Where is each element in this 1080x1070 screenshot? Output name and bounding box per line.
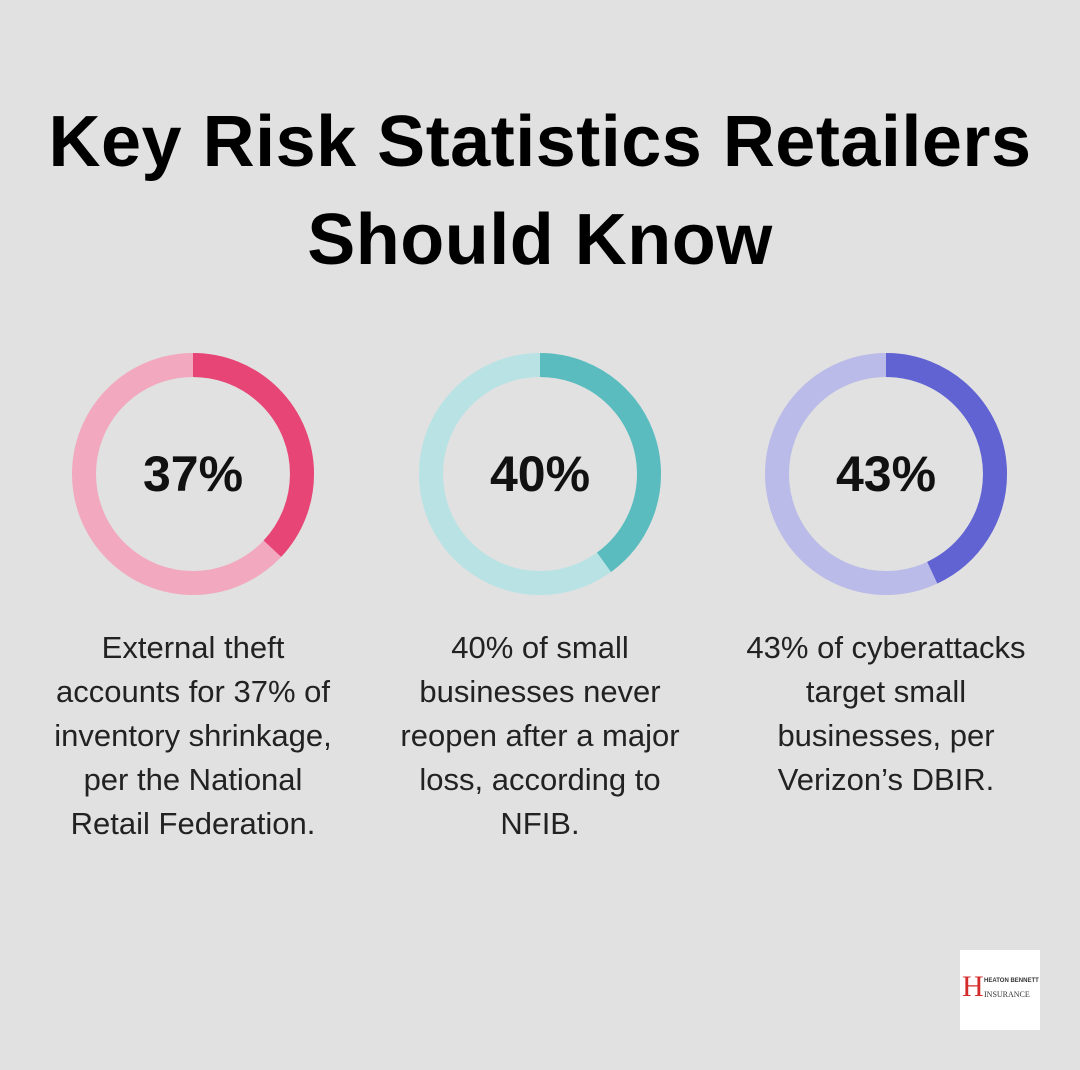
text: external theft bbox=[54, 630, 332, 841]
title bbox=[48, 102, 1031, 280]
donut: 37% bbox=[72, 353, 314, 595]
donut: 43% bbox=[765, 353, 1007, 595]
logo bbox=[960, 950, 1040, 1030]
text: small businesses: reopen after a major bbox=[400, 718, 680, 753]
text: external theft: inventory shrinkage, bbox=[54, 718, 332, 753]
text: cyberattacks bbox=[746, 630, 1026, 797]
donut: 40%: 40% bbox=[490, 446, 590, 502]
text: external theft: accounts for 37% of bbox=[56, 674, 330, 709]
text: external theft: External theft bbox=[102, 630, 284, 665]
text: small businesses: loss, according to bbox=[419, 762, 661, 797]
text: small businesses: NFIB. bbox=[500, 806, 580, 841]
donut: 37%: 37% bbox=[143, 446, 243, 502]
donut: 43%: 43% bbox=[836, 446, 936, 502]
title: Should Know bbox=[307, 200, 773, 280]
text: small businesses: businesses never bbox=[419, 674, 661, 709]
text: cyberattacks: target small bbox=[806, 674, 966, 709]
text: cyberattacks: 43% of cyberattacks bbox=[746, 630, 1026, 665]
text: cyberattacks: businesses, per bbox=[777, 718, 995, 753]
text: small businesses: 40% of small bbox=[451, 630, 629, 665]
text: small businesses bbox=[400, 630, 680, 841]
donut: 40% bbox=[419, 353, 661, 595]
text: external theft: per the National bbox=[84, 762, 302, 797]
logo: INSURANCE bbox=[984, 990, 1030, 999]
title: Key Risk Statistics Retailers bbox=[48, 102, 1031, 182]
logo: HEATON BENNETT bbox=[984, 978, 1039, 984]
text: cyberattacks: Verizon’s DBIR. bbox=[778, 762, 994, 797]
text: external theft: Retail Federation. bbox=[71, 806, 315, 841]
logo: H bbox=[962, 970, 984, 1003]
